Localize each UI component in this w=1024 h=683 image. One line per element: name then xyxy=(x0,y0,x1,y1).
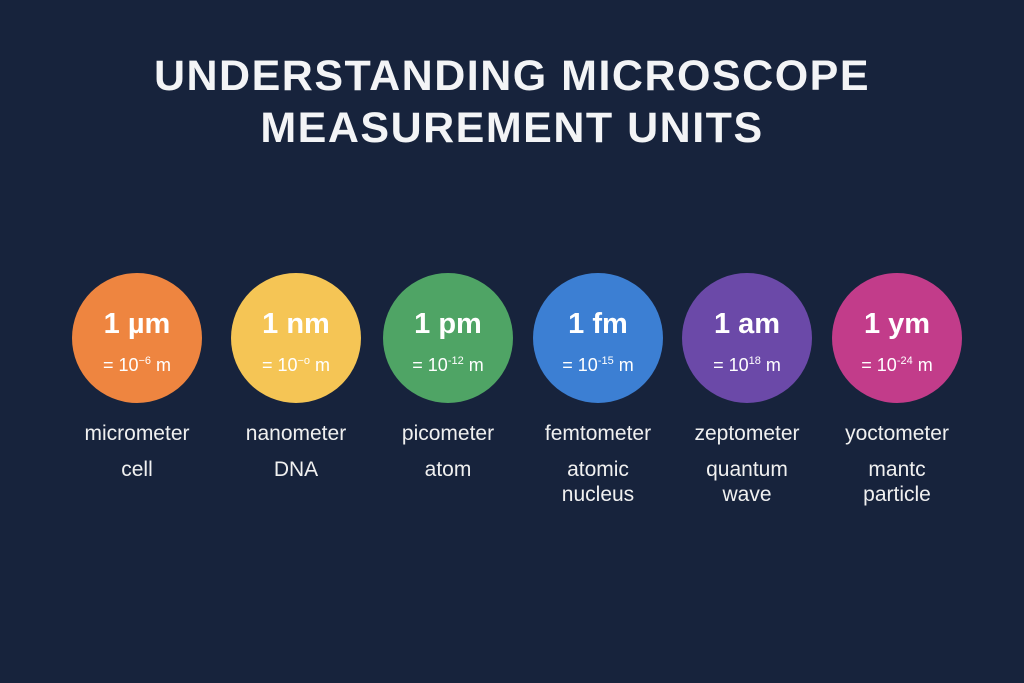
circle: yoctometer: 1 ym xyxy=(864,308,930,340)
example: quantum wave: wave xyxy=(722,483,772,506)
circle: zeptometer xyxy=(682,273,812,403)
example: quantum wave: quantum xyxy=(706,458,788,481)
example: mantc particle: mantc xyxy=(868,458,926,481)
example: atom: atom xyxy=(425,458,471,481)
label: zeptometer: zeptometer xyxy=(694,422,800,445)
circle: zeptometer: = 1018 m xyxy=(713,355,781,375)
label: picometer: picometer xyxy=(402,422,494,445)
example: cell: cell xyxy=(121,458,153,481)
circle: nanometer xyxy=(231,273,361,403)
label: femtometer: femtometer xyxy=(545,422,651,445)
example: atomic nucleus xyxy=(562,458,634,506)
label: nanometer: nanometer xyxy=(246,422,346,445)
unit: nanometer xyxy=(231,273,361,481)
circle: nanometer: 1 nm xyxy=(262,308,330,340)
circle: yoctometer: = 10-24 m xyxy=(861,355,933,375)
circle: micrometer: = 10−6 m xyxy=(103,355,171,375)
title xyxy=(154,52,870,152)
label: yoctometer: yoctometer xyxy=(845,422,949,445)
circle: femtometer: 1 fm xyxy=(568,308,628,340)
example: mantc particle xyxy=(863,458,931,506)
circle: picometer: = 10-12 m xyxy=(412,355,484,375)
example: atomic nucleus: nucleus xyxy=(562,483,634,506)
unit: micrometer xyxy=(72,273,202,481)
circle: femtometer xyxy=(533,273,663,403)
circle: femtometer: = 10-15 m xyxy=(562,355,634,375)
circle: yoctometer xyxy=(832,273,962,403)
unit: zeptometer xyxy=(682,273,812,506)
unit: femtometer xyxy=(533,273,663,506)
circle: picometer xyxy=(383,273,513,403)
example: DNA: DNA xyxy=(274,458,318,481)
circle: zeptometer: 1 am xyxy=(714,308,780,340)
example: atomic nucleus: atomic xyxy=(567,458,629,481)
circle: micrometer xyxy=(72,273,202,403)
unit: yoctometer xyxy=(832,273,962,506)
title: UNDERSTANDING MICROSCOPE xyxy=(154,52,870,100)
example: mantc particle: particle xyxy=(863,483,931,506)
title: MEASUREMENT UNITS xyxy=(260,104,764,152)
circle: micrometer: 1 µm xyxy=(104,308,170,340)
circle: picometer: 1 pm xyxy=(414,308,482,340)
label: micrometer: micrometer xyxy=(84,422,190,445)
example: quantum wave xyxy=(706,458,788,506)
circle: nanometer: = 10−o m xyxy=(262,355,330,375)
unit: picometer xyxy=(383,273,513,481)
